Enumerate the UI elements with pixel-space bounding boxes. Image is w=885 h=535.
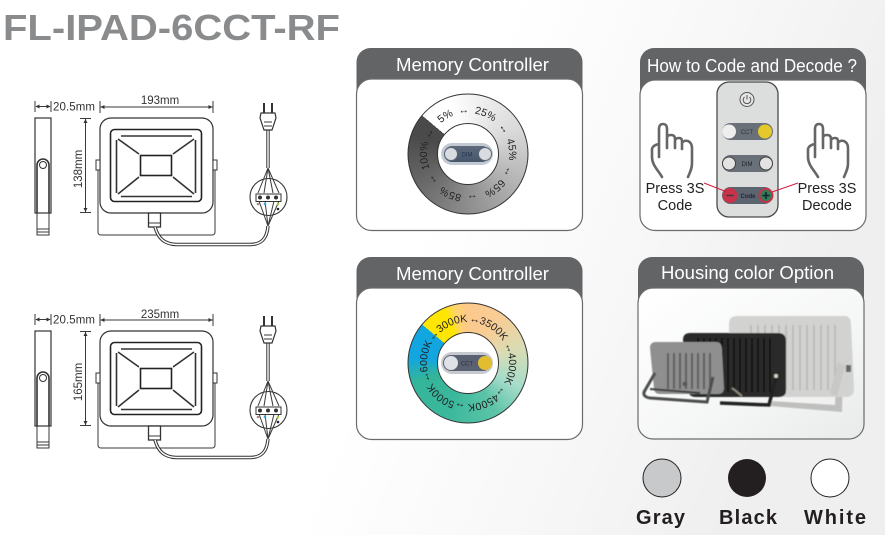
dimming ring: 25% xyxy=(475,106,496,121)
panel body xyxy=(640,80,866,230)
panel heading: How to Code and Decode ? xyxy=(647,56,857,76)
text: press code: Code xyxy=(658,198,692,214)
colour temperature ring: 6000K xyxy=(420,340,432,372)
dimension: height xyxy=(73,331,91,426)
dimming ring: ↔ xyxy=(431,176,436,182)
side view xyxy=(35,118,51,235)
DIM button xyxy=(441,143,493,165)
dimming ring: 65% xyxy=(485,180,505,198)
panel header xyxy=(640,48,866,100)
colour temperature ring: ↔ xyxy=(432,334,437,339)
cable and plug xyxy=(155,103,287,244)
CCT button: CCT xyxy=(461,362,473,368)
front view xyxy=(96,118,217,235)
swatch: gray xyxy=(643,459,681,497)
white housing xyxy=(729,316,854,412)
swatch: black xyxy=(728,459,766,497)
colour temperature ring: 4000K xyxy=(504,353,516,386)
dimension: height: 165mm xyxy=(73,363,85,401)
product photo: three housings xyxy=(644,316,854,412)
title: FL-IPAD-6CCT-RF xyxy=(3,7,340,48)
dimension: width xyxy=(100,309,213,326)
DIM button: DIM xyxy=(462,152,472,158)
panel: memory controller colour temperature xyxy=(356,257,584,440)
dimension: height xyxy=(73,118,91,213)
panel heading: Memory Controller xyxy=(396,55,549,75)
dimension: width: 193mm xyxy=(141,95,179,107)
panel heading: Memory Controller xyxy=(396,264,549,284)
dimension drawing: 235mm model xyxy=(35,309,287,458)
panel: housing colour option xyxy=(636,257,866,529)
panel body xyxy=(356,288,582,440)
colour temperature ring xyxy=(408,302,528,424)
front view xyxy=(96,331,217,448)
gray housing xyxy=(644,342,724,402)
cable and plug xyxy=(155,316,287,458)
panel header xyxy=(356,257,582,309)
dimension drawing: 193mm model xyxy=(35,95,287,244)
colour temperature ring: ↔ xyxy=(472,319,478,322)
dimension: width xyxy=(100,95,213,113)
arrow: decode line xyxy=(772,183,798,192)
icon: left hand xyxy=(652,124,692,177)
text: press code: Press 3S xyxy=(646,181,704,197)
dimming ring: ↔ xyxy=(469,195,476,198)
swatch: white xyxy=(811,459,849,497)
dimming ring: 45% xyxy=(508,139,516,160)
colour temperature ring: ↔ xyxy=(506,345,510,352)
dimension: depth: 20.5mm xyxy=(53,314,95,326)
dimension: depth: 20.5mm xyxy=(53,102,95,114)
panel header xyxy=(638,257,864,310)
side view xyxy=(35,331,51,448)
DIM switch: DIM xyxy=(742,162,752,168)
dimming ring: 100% xyxy=(420,142,430,170)
code switch: Code xyxy=(740,194,756,200)
panel: memory controller dimming xyxy=(356,48,584,232)
colour temperature ring: ↔ xyxy=(498,388,502,394)
dimension: height: 138mm xyxy=(73,150,85,188)
panel header xyxy=(356,48,582,100)
colour temperature ring: ↔ xyxy=(457,404,463,406)
black housing xyxy=(683,333,786,405)
dimming ring: 85% xyxy=(440,187,461,202)
panel: how to code and decode xyxy=(640,48,866,230)
label: gray: Gray xyxy=(636,507,686,529)
label: black: Black xyxy=(719,507,778,529)
colour temperature ring: 5000K xyxy=(426,383,454,408)
dimension: depth xyxy=(35,314,95,326)
dimming ring: ↔ xyxy=(505,168,509,174)
dimming ring: 5% xyxy=(437,110,453,122)
icon: right hand xyxy=(808,124,848,177)
colour temperature ring: ↔ xyxy=(426,374,430,380)
panel body xyxy=(356,79,582,230)
panel heading: Housing color Option xyxy=(661,263,834,283)
colour temperature ring: 3000K xyxy=(436,314,468,332)
icon: power button xyxy=(740,92,754,106)
dimension: width: 235mm xyxy=(141,309,179,321)
dimming ring: ↔ xyxy=(460,110,467,113)
colour temperature ring: 3500K xyxy=(480,317,508,341)
text: press decode: Decode xyxy=(802,198,852,214)
CCT button xyxy=(441,352,493,374)
dimension: depth xyxy=(35,101,95,114)
CCT switch: CCT xyxy=(741,130,753,136)
dimming ring xyxy=(408,94,528,214)
arrow: code line xyxy=(704,183,727,192)
dimming ring: ↔ xyxy=(501,126,505,132)
text: press decode: Press 3S xyxy=(798,181,856,197)
colour temperature ring: 4500K xyxy=(468,394,498,412)
dimming ring: ↔ xyxy=(428,131,432,137)
remote control xyxy=(717,82,778,217)
label: white: White xyxy=(804,507,866,529)
panel body xyxy=(638,288,864,439)
